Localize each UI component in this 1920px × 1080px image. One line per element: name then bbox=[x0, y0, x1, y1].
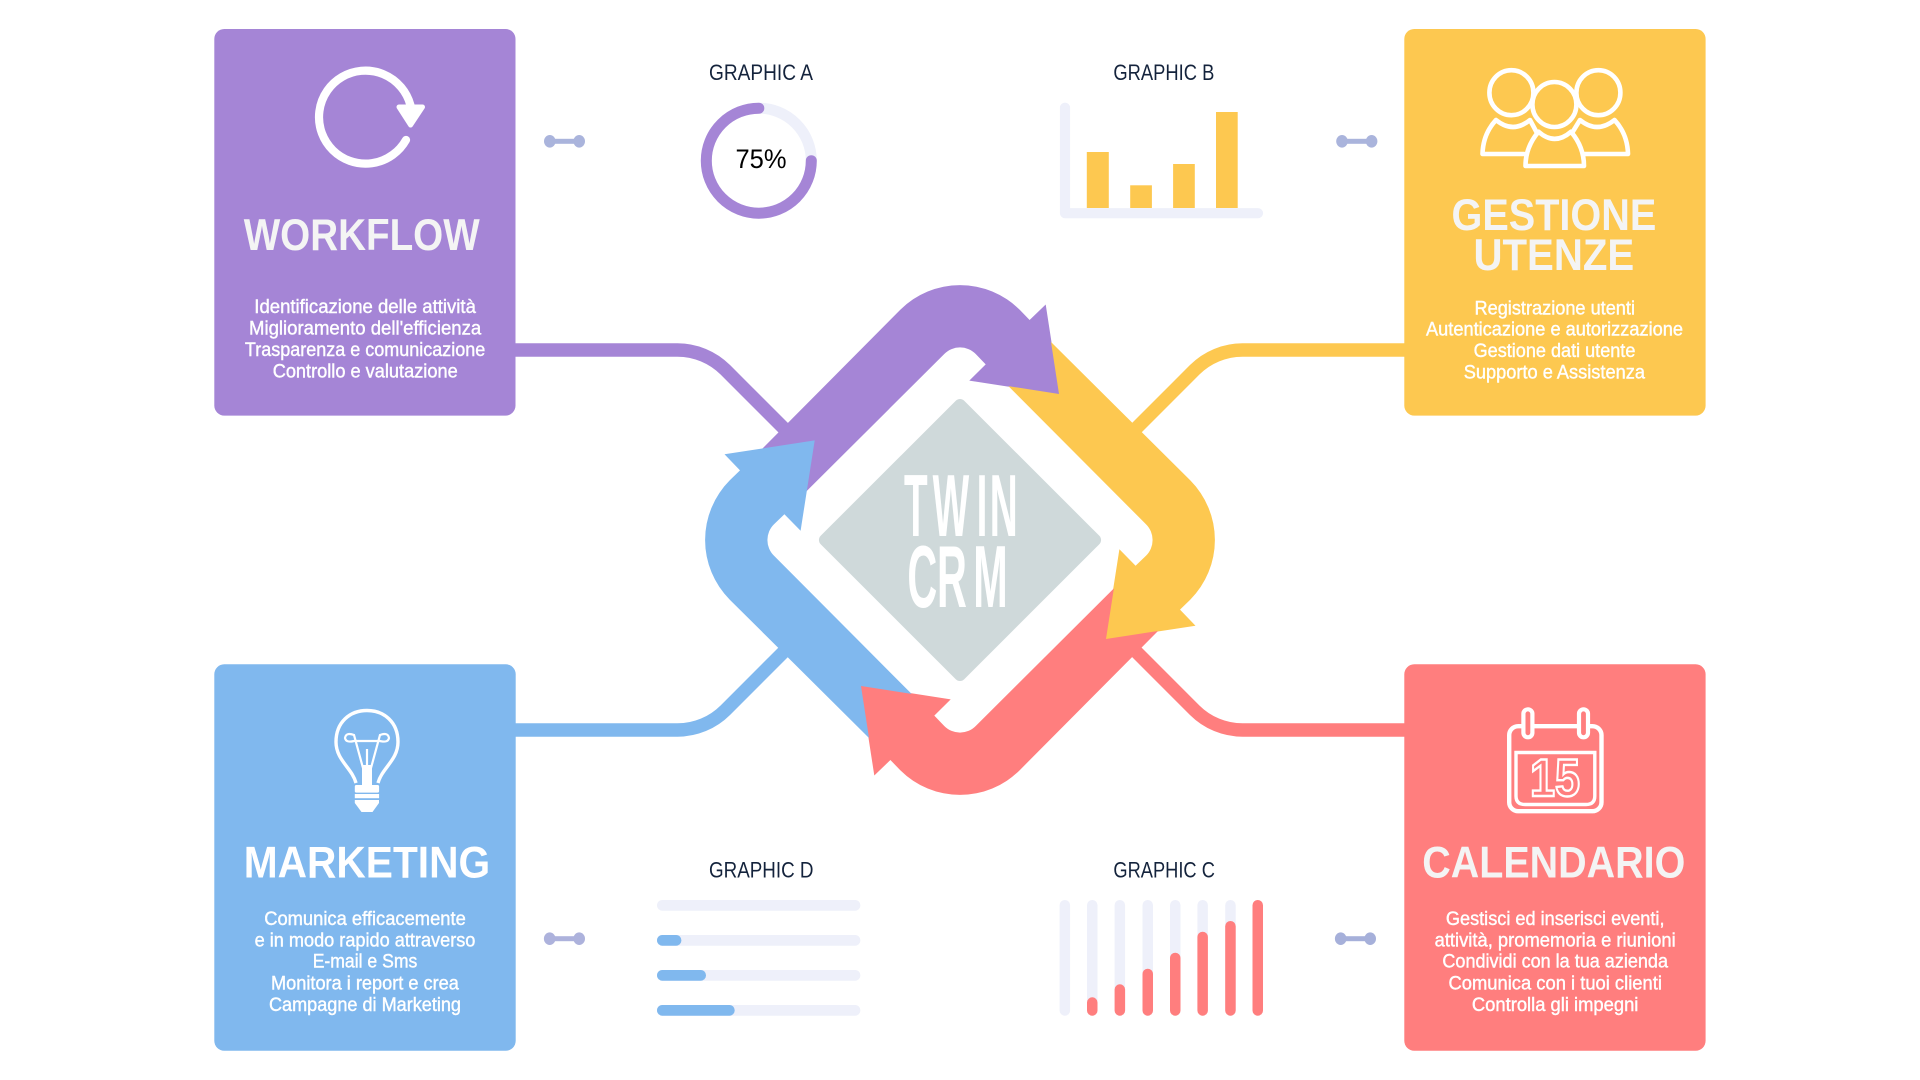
link icon: graphic B to gestione utenze bbox=[1336, 135, 1377, 148]
label: GRAPHIC B bbox=[1113, 60, 1214, 85]
fills bbox=[657, 935, 735, 1016]
label: GRAPHIC A bbox=[709, 60, 813, 85]
icon: calendar: 15 bbox=[1530, 749, 1580, 808]
logo: Twin CRM bbox=[904, 457, 1018, 626]
text block: Controlla gli impegni bbox=[1472, 994, 1638, 1016]
text block: Controllo e valutazione bbox=[273, 360, 458, 382]
arrow: yellow bbox=[1008, 342, 1215, 640]
connector: calendario bbox=[1128, 644, 1405, 730]
panel background bbox=[214, 664, 516, 1051]
arrow: blue bbox=[705, 440, 912, 738]
icon: calendar bbox=[1509, 709, 1602, 811]
heading: UTENZE bbox=[1474, 231, 1634, 280]
text block: Identificazione delle attività bbox=[254, 296, 476, 318]
donut track bbox=[706, 108, 811, 213]
logo word: CRM: CRM bbox=[907, 527, 1008, 626]
central cycle diagram bbox=[705, 285, 1215, 795]
graphic B: bar chart bbox=[1065, 60, 1258, 213]
text block: Monitora i report e crea bbox=[271, 973, 459, 995]
text block: Trasparenza e comunicazione bbox=[245, 339, 485, 361]
heading: GESTIONE bbox=[1452, 191, 1656, 240]
connector: gestione utenze bbox=[1128, 350, 1405, 436]
icon: users bbox=[1482, 70, 1628, 166]
connector: marketing bbox=[515, 644, 792, 730]
heading: MARKETING bbox=[244, 839, 490, 888]
label: GRAPHIC C bbox=[1113, 857, 1215, 882]
bars bbox=[1087, 112, 1238, 208]
text block: attività, promemoria e riunioni bbox=[1435, 930, 1676, 952]
tracks bbox=[657, 900, 860, 1016]
link icon: workflow to graphic A bbox=[544, 135, 585, 148]
arrow: red bbox=[860, 588, 1158, 795]
heading bbox=[1452, 191, 1656, 280]
logo word: TWIN: TWIN bbox=[904, 457, 1018, 555]
text block: Campagne di Marketing bbox=[269, 994, 461, 1016]
tracks bbox=[1060, 900, 1236, 1016]
link icon: graphic C to calendario bbox=[1335, 932, 1376, 945]
arrow: purple bbox=[762, 285, 1060, 492]
text block bbox=[245, 296, 485, 382]
heading: WORKFLOW bbox=[244, 211, 480, 260]
graphic A: donut chart bbox=[706, 60, 813, 213]
panel background bbox=[1404, 664, 1706, 1051]
text block bbox=[1426, 297, 1683, 384]
panel: calendario bbox=[1404, 664, 1706, 1051]
percent: 75% bbox=[736, 144, 786, 174]
text block: Autenticazione e autorizzazione bbox=[1426, 318, 1683, 340]
text block: Registrazione utenti bbox=[1474, 297, 1635, 319]
text block: Gestione dati utente bbox=[1474, 340, 1635, 362]
text block: Miglioramento dell'efficienza bbox=[249, 318, 481, 340]
text block bbox=[1435, 908, 1676, 1016]
text block: e in modo rapido attraverso bbox=[255, 930, 476, 952]
icon: light bulb bbox=[336, 710, 398, 812]
text block: Comunica efficacemente bbox=[264, 908, 466, 930]
text block: Gestisci ed inserisci eventi, bbox=[1446, 908, 1664, 930]
axes bbox=[1065, 108, 1258, 213]
graphic D: progress bars bbox=[657, 857, 860, 1016]
icon: cycle arrow bbox=[319, 71, 422, 164]
text block bbox=[255, 908, 476, 1016]
text block: E-mail e Sms bbox=[313, 951, 418, 973]
panel background bbox=[1404, 29, 1706, 416]
panel: gestione utenze bbox=[1404, 29, 1706, 416]
panel: marketing bbox=[214, 664, 516, 1051]
center diamond bbox=[816, 396, 1104, 684]
connector: workflow bbox=[515, 350, 792, 436]
text block: Supporto e Assistenza bbox=[1464, 362, 1645, 384]
fills bbox=[1087, 900, 1263, 1016]
heading: CALENDARIO bbox=[1422, 839, 1685, 888]
link icon: marketing to graphic D bbox=[544, 932, 585, 945]
text block: Comunica con i tuoi clienti bbox=[1448, 973, 1662, 995]
graphic C: vertical progress bars bbox=[1060, 857, 1263, 1016]
panel background bbox=[214, 29, 516, 416]
label: GRAPHIC D bbox=[709, 857, 814, 882]
text block: Condividi con la tua azienda bbox=[1442, 951, 1668, 973]
panel: workflow bbox=[214, 29, 516, 416]
donut value bbox=[706, 108, 811, 213]
